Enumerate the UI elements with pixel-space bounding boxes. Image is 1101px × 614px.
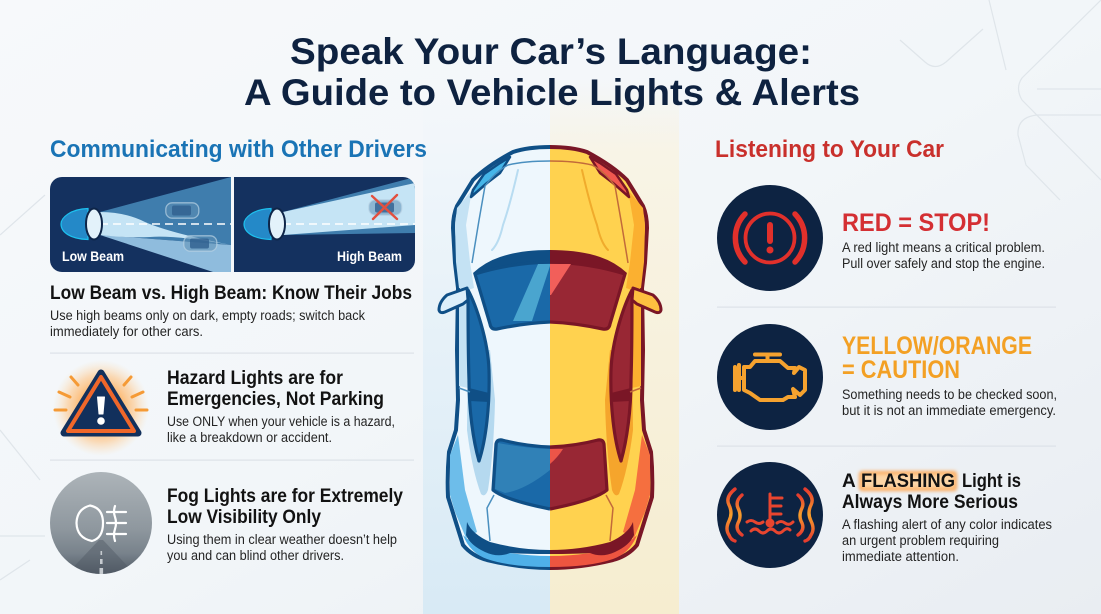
icon: hazard triangle (53, 360, 149, 456)
text block: flashing light: A flashing alert of any color indicates (842, 517, 1052, 532)
text block: yellow means caution: but it is not an immediate emergency. (842, 403, 1056, 418)
text block: hazard lights: like a breakdown or accident. (167, 430, 332, 445)
label: low beam: Low Beam (62, 248, 124, 264)
car: yellow and red half (550, 147, 661, 568)
text block: yellow means caution: = CAUTION (842, 356, 960, 384)
text block: flashing light: Light is (962, 471, 1021, 492)
text block: red means stop (842, 209, 1045, 271)
text block: fog lights: Fog Lights are for Extremely (167, 486, 403, 507)
text block: yellow means caution: YELLOW/ORANGE (842, 332, 1032, 360)
text block: low vs high beam (50, 283, 412, 339)
icon: check engine (717, 324, 823, 430)
text block: low vs high beam: Use high beams only on dark, empty roads; switch back (50, 308, 365, 323)
text block: hazard lights: Hazard Lights are for (167, 368, 344, 389)
title: A Guide to Vehicle Lights & Alerts (244, 72, 860, 113)
icon: headlight (244, 208, 285, 240)
text block: flashing light: FLASHING (861, 471, 955, 492)
text block: fog lights: Low Visibility Only (167, 507, 321, 528)
center color band: yellow side (550, 0, 679, 614)
heading: communicating with other drivers: Communicating with Other Drivers (50, 136, 427, 163)
text block: fog lights: Using them in clear weather doesn’t help (167, 532, 397, 547)
text block: yellow means caution: Something needs to be checked soon, (842, 387, 1057, 402)
text block: hazard lights: Emergencies, Not Parking (167, 389, 384, 410)
icon: red brake warning (717, 185, 823, 291)
heading: listening to your car: Listening to Your Car (715, 136, 944, 163)
center color band: blue side (423, 0, 550, 614)
text block: flashing light: Always More Serious (842, 492, 1018, 513)
icon: crossed out car (369, 195, 402, 219)
text block: fog lights (167, 486, 403, 563)
label: high beam: High Beam (337, 248, 402, 264)
icon: flashing temperature warning (717, 462, 823, 568)
icon: oncoming car (166, 203, 199, 218)
panel: low beam diagram (50, 177, 231, 272)
text block: red means stop: RED = STOP! (842, 209, 990, 237)
text block: flashing light: an urgent problem requiring (842, 533, 999, 548)
panel: high beam diagram (234, 177, 415, 272)
text block: fog lights: you and can blind other drivers. (167, 548, 344, 563)
icon: car ahead (184, 236, 217, 251)
icon: fog light (50, 472, 152, 574)
car: blue half (439, 147, 550, 568)
text block: flashing light: A (842, 471, 856, 492)
icon: headlight (61, 208, 102, 240)
text block: flashing light (842, 471, 1052, 564)
text block: flashing light: immediate attention. (842, 549, 959, 564)
text block: red means stop: Pull over safely and stop the engine. (842, 256, 1045, 271)
text block: hazard lights (167, 368, 395, 445)
title (244, 31, 860, 113)
text block: low vs high beam: Low Beam vs. High Beam: Know Their Jobs (50, 283, 412, 304)
text block: hazard lights: Use ONLY when your vehicle is a hazard, (167, 414, 395, 429)
title: Speak Your Car’s Language: (290, 31, 812, 72)
text block: low vs high beam: immediately for other cars. (50, 324, 203, 339)
text block: yellow means caution (842, 332, 1057, 418)
text block: red means stop: A red light means a critical problem. (842, 240, 1045, 255)
